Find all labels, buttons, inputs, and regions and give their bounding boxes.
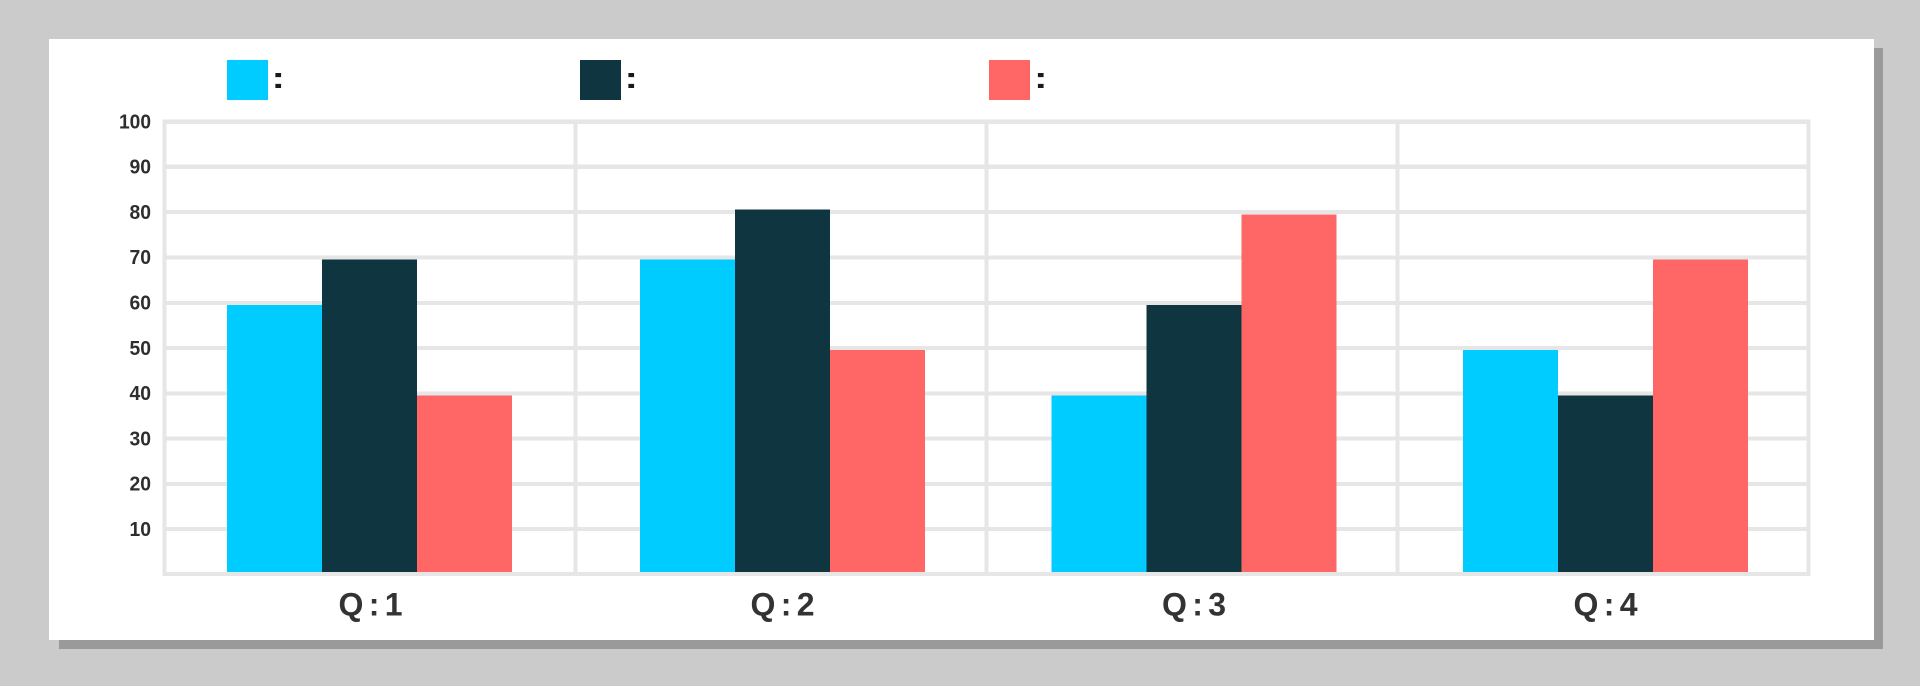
legend item: navy series <box>580 60 638 100</box>
y axis labels <box>119 112 151 541</box>
bar group: Q1 <box>227 260 512 572</box>
legend <box>227 60 1047 100</box>
y axis labels: 40 <box>130 383 151 405</box>
legend item: cyan series: : <box>272 61 285 95</box>
x axis labels: Q : 3 <box>1162 586 1226 622</box>
legend item: cyan series <box>227 60 285 100</box>
x axis labels: Q : 1 <box>338 586 403 622</box>
x axis labels <box>338 586 1638 622</box>
y axis labels: 50 <box>130 338 151 360</box>
y axis labels: 30 <box>130 428 151 450</box>
x axis labels: Q : 2 <box>750 586 815 622</box>
bar group: Q3 <box>1052 214 1336 572</box>
y axis labels: 90 <box>130 156 151 178</box>
y axis labels: 70 <box>130 247 151 269</box>
legend item: navy series: : <box>624 61 638 95</box>
y axis labels: 80 <box>130 202 151 224</box>
x axis labels: Q : 4 <box>1573 586 1638 622</box>
bar group: Q2 <box>640 210 925 572</box>
y axis labels: 20 <box>130 474 151 496</box>
bar group: Q4 <box>1463 260 1748 572</box>
y axis labels: 100 <box>119 112 151 134</box>
chart grid <box>162 120 1810 576</box>
legend item: red series: : <box>1034 61 1047 95</box>
legend item: red series <box>989 60 1047 100</box>
y axis labels: 10 <box>130 519 151 541</box>
y axis labels: 60 <box>130 292 151 314</box>
